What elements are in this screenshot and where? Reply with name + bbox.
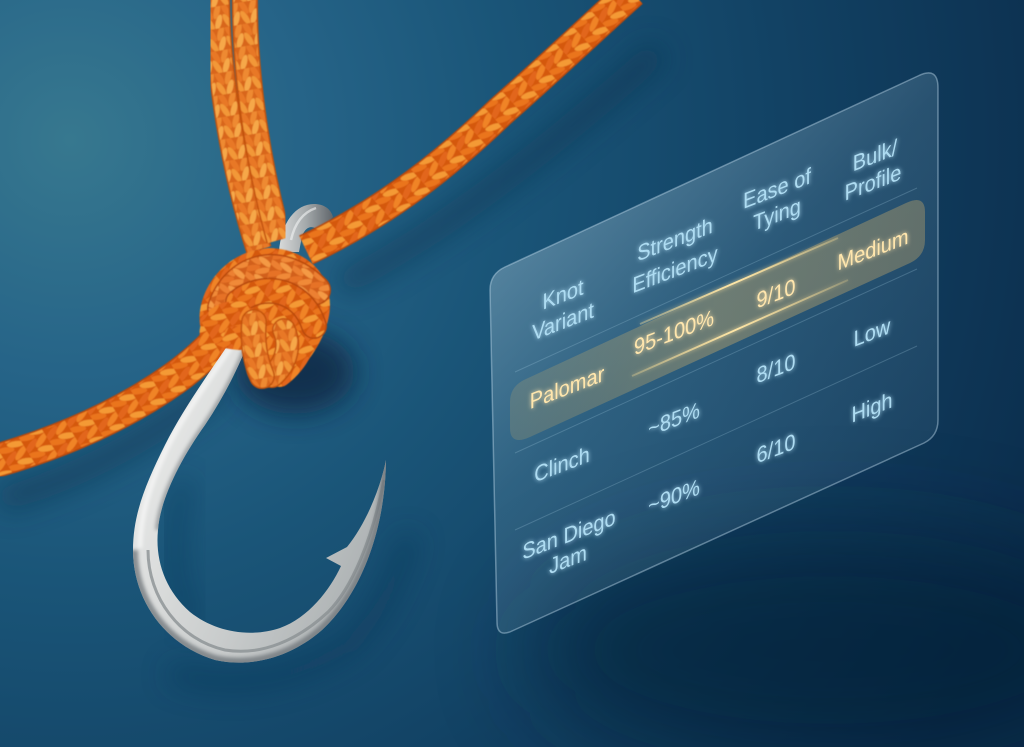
table header row: Strength xyxy=(637,212,713,267)
table header row: Knot xyxy=(542,274,584,315)
table header row: Profile xyxy=(845,159,901,206)
highlighted row: Palomar xyxy=(510,200,925,440)
row: Palomar values: Medium xyxy=(837,223,909,276)
row: Clinch values: 8/10 xyxy=(757,348,795,389)
table header row: Ease of xyxy=(743,162,812,214)
table divider lines xyxy=(515,188,917,530)
row: Palomar values: 95-100% xyxy=(634,304,714,360)
row glow lines xyxy=(632,238,848,376)
row: San Diego Jam values: High xyxy=(851,387,893,428)
row: Palomar values: Palomar xyxy=(530,360,604,414)
row: Clinch values: Low xyxy=(854,312,890,352)
table header row: Variant xyxy=(532,297,594,346)
glass table panel xyxy=(490,73,938,633)
row: San Diego Jam values: Jam xyxy=(549,539,587,579)
row: Palomar values xyxy=(530,223,909,414)
row: Clinch values xyxy=(534,312,890,488)
table header row: Bulk/ xyxy=(853,134,898,177)
rope: knot xyxy=(200,248,330,388)
row: San Diego Jam values: 6/10 xyxy=(757,428,795,469)
rope: lower left line xyxy=(0,318,238,462)
table header row: Tying xyxy=(753,192,801,236)
rope: two standing strands going up xyxy=(217,0,279,250)
row: San Diego Jam values: ~90% xyxy=(648,474,700,519)
row: Clinch values: Clinch xyxy=(534,441,590,488)
fish hook xyxy=(133,330,386,663)
hook eye xyxy=(279,204,333,252)
row: Palomar values: 9/10 xyxy=(757,273,795,314)
row: San Diego Jam values xyxy=(522,387,893,579)
rope: upper right line xyxy=(306,0,632,250)
row: Clinch values: ~85% xyxy=(648,397,700,442)
table header row: Efficiency xyxy=(632,240,718,298)
row: San Diego Jam values: San Diego xyxy=(522,504,616,565)
panel: glass card xyxy=(490,73,938,633)
table header row xyxy=(532,134,901,346)
